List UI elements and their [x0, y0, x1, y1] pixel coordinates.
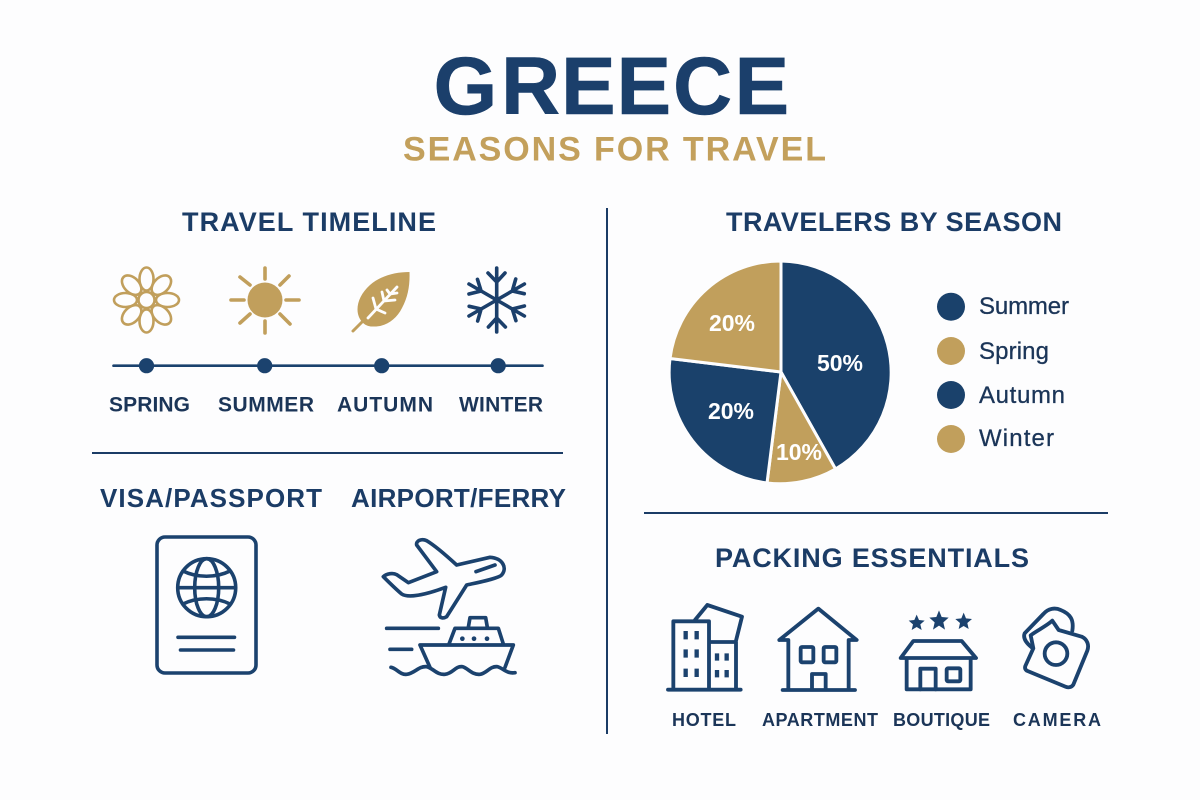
icon: camera — [1024, 609, 1088, 687]
title block — [403, 41, 826, 168]
heading: travel timeline: TRAVEL TIMELINE — [182, 207, 436, 237]
season labels: SUMMER — [218, 394, 314, 416]
heading: airport/ferry: AIRPORT/FERRY — [351, 483, 566, 513]
panel: travelers by season — [669, 207, 1069, 484]
icon labels: BOUTIQUE — [893, 710, 990, 730]
icon labels — [672, 710, 1101, 730]
icon: apartment — [779, 609, 857, 690]
panel: visa and passport — [100, 483, 322, 673]
slice: summer 50% — [781, 261, 891, 469]
icon: passport — [157, 537, 256, 673]
pie percentage labels: 20% — [709, 310, 755, 336]
icon: autumn leaf — [353, 272, 410, 331]
legend: Summer — [979, 293, 1069, 320]
slice: spring 20% — [670, 261, 781, 372]
season labels: WINTER — [459, 394, 543, 416]
panel: travel timeline — [109, 207, 543, 416]
heading: packing essentials: PACKING ESSENTIALS — [715, 543, 1029, 573]
pie chart — [669, 261, 891, 484]
pie percentage labels — [708, 310, 863, 465]
legend: Spring — [979, 338, 1049, 365]
season labels — [109, 394, 543, 416]
slice: winter 10% — [767, 372, 836, 484]
icon: boutique with stars — [901, 610, 976, 689]
icon labels: HOTEL — [672, 710, 736, 730]
pie percentage labels: 50% — [817, 350, 863, 376]
slice: autumn 20% — [669, 358, 781, 483]
season labels: SPRING — [109, 394, 190, 416]
icon: winter snowflake — [465, 268, 529, 332]
panel: packing essentials — [668, 543, 1101, 730]
pie percentage labels: 10% — [776, 439, 822, 465]
icon labels: CAMERA — [1013, 710, 1101, 730]
icon: spring flower — [114, 268, 179, 332]
pie percentage labels: 20% — [708, 398, 754, 424]
heading: visa/passport: VISA/PASSPORT — [100, 483, 322, 513]
legend: Autumn — [979, 382, 1065, 409]
timeline line and markers — [114, 358, 542, 373]
icon labels: APARTMENT — [762, 710, 878, 730]
subtitle: SEASONS FOR TRAVEL — [403, 130, 826, 168]
title: GREECE — [434, 41, 789, 132]
panel: airport and ferry — [351, 483, 566, 674]
heading: travelers by season: TRAVELERS BY SEASON — [726, 207, 1062, 237]
icon: hotel — [668, 605, 742, 690]
icon: summer sun — [231, 268, 299, 333]
legend: Winter — [979, 425, 1054, 452]
season labels: AUTUMN — [337, 394, 433, 416]
legend — [937, 293, 1069, 453]
icon: plane and ferry — [383, 540, 515, 674]
